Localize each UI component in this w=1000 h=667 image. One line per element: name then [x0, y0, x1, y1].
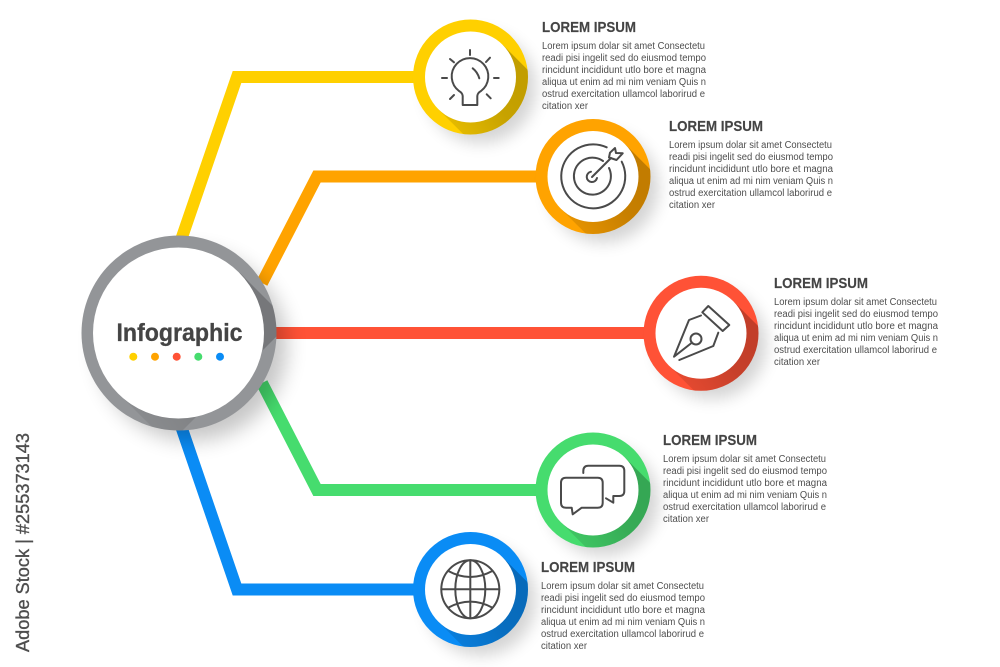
body 1: aliqua ut enim ad mi nim veniam Quis n [542, 77, 706, 88]
icon: pen nib [674, 306, 729, 360]
node 3: red pen nib [644, 276, 772, 405]
hub colour dots [129, 353, 224, 361]
heading 3: LOREM IPSUM [774, 275, 868, 292]
body 1 [542, 41, 706, 112]
body 5: rincidunt incididunt utlo bore et magna [541, 605, 705, 616]
body 4: citation xer [663, 514, 710, 525]
node 5: blue globe [413, 532, 542, 662]
connector: red [270, 327, 650, 339]
body 2 [669, 140, 833, 211]
body 2: readi pisi ingelit sed do eiusmod tempo [669, 152, 833, 163]
node 1: yellow lightbulb [413, 20, 542, 149]
body 2: citation xer [669, 200, 716, 211]
side credit label: Adobe Stock | #255373143 [13, 433, 33, 652]
hub title: Infographic [116, 319, 243, 347]
body 1: ostrud exercitation ullamcol laborirud e [542, 89, 705, 100]
heading 4: LOREM IPSUM [663, 432, 757, 449]
central hub [82, 236, 290, 444]
body 5: citation xer [541, 641, 588, 652]
body 3: Lorem ipsum dolar sit amet Consectetu [774, 297, 937, 308]
body 5: readi pisi ingelit sed do eiusmod tempo [541, 593, 705, 604]
text block 3 [774, 275, 938, 368]
connector: green [262, 383, 542, 490]
body 4 [663, 454, 827, 525]
body 5 [541, 581, 705, 652]
icon: lightbulb [442, 50, 499, 105]
icon: speech bubbles [561, 466, 624, 514]
text block 2 [669, 118, 833, 211]
icon: target with arrow [561, 144, 625, 208]
body 3: rincidunt incididunt utlo bore et magna [774, 321, 938, 332]
body 4: aliqua ut enim ad mi nim veniam Quis n [663, 490, 827, 501]
body 2: rincidunt incididunt utlo bore et magna [669, 164, 833, 175]
connector: yellow [181, 77, 420, 240]
body 4: ostrud exercitation ullamcol laborirud e [663, 502, 826, 513]
connector: orange [262, 176, 542, 283]
body 2: ostrud exercitation ullamcol laborirud e [669, 188, 832, 199]
body 1: citation xer [542, 101, 589, 112]
heading 5: LOREM IPSUM [541, 559, 635, 576]
body 5: Lorem ipsum dolar sit amet Consectetu [541, 581, 704, 592]
body 4: rincidunt incididunt utlo bore et magna [663, 478, 827, 489]
text block 5 [541, 559, 705, 652]
body 1: readi pisi ingelit sed do eiusmod tempo [542, 53, 706, 64]
node 4: green chat [536, 432, 664, 562]
body 3: citation xer [774, 357, 821, 368]
body 1: Lorem ipsum dolar sit amet Consectetu [542, 41, 705, 52]
body 2: aliqua ut enim ad mi nim veniam Quis n [669, 176, 833, 187]
body 1: rincidunt incididunt utlo bore et magna [542, 65, 706, 76]
icon: globe [441, 560, 499, 618]
node 2: orange target [536, 119, 664, 248]
connector: blue [181, 426, 420, 590]
text block 1 [542, 19, 706, 112]
text block 4 [663, 432, 827, 525]
body 4: Lorem ipsum dolar sit amet Consectetu [663, 454, 826, 465]
body 3: ostrud exercitation ullamcol laborirud e [774, 345, 937, 356]
body 4: readi pisi ingelit sed do eiusmod tempo [663, 466, 827, 477]
body 3: aliqua ut enim ad mi nim veniam Quis n [774, 333, 938, 344]
body 2: Lorem ipsum dolar sit amet Consectetu [669, 140, 832, 151]
body 3: readi pisi ingelit sed do eiusmod tempo [774, 309, 938, 320]
heading 1: LOREM IPSUM [542, 19, 636, 36]
body 5: ostrud exercitation ullamcol laborirud e [541, 629, 704, 640]
body 5: aliqua ut enim ad mi nim veniam Quis n [541, 617, 705, 628]
heading 2: LOREM IPSUM [669, 118, 763, 135]
body 3 [774, 297, 938, 368]
